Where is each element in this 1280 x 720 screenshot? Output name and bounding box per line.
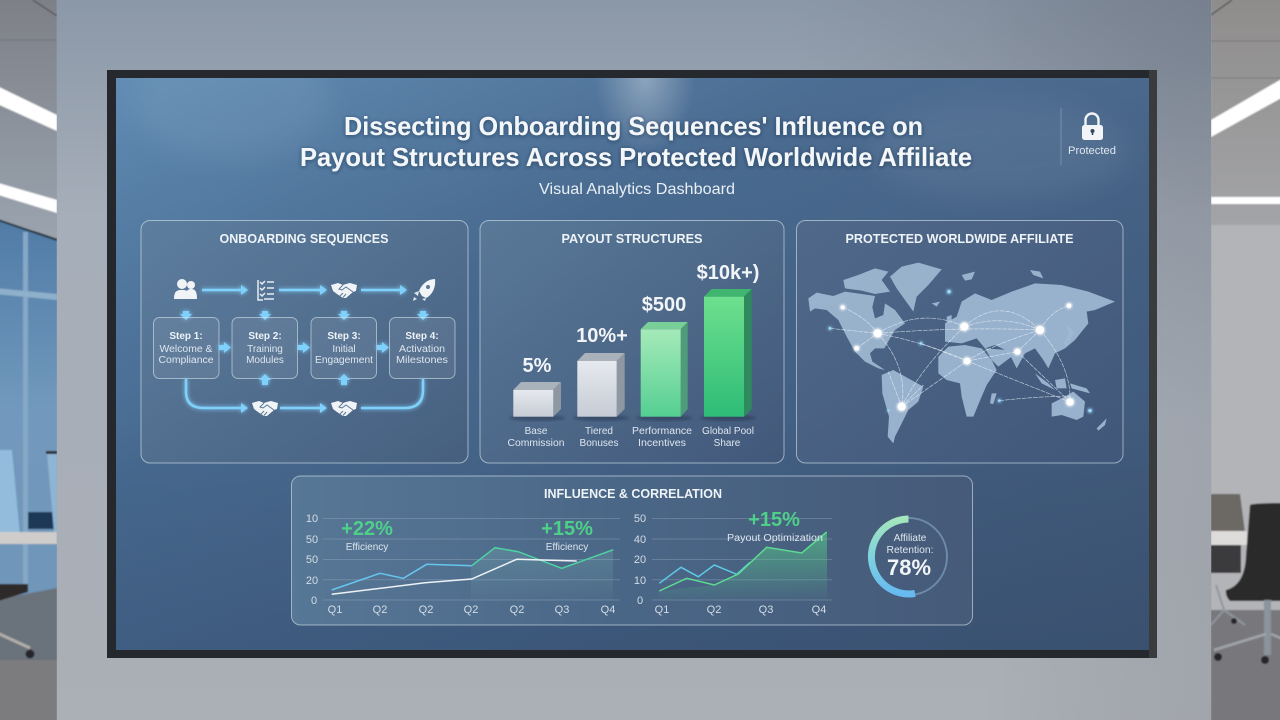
subtitle: Visual Analytics Dashboard xyxy=(539,181,735,198)
arrows: bottom loop xyxy=(186,379,423,413)
line chart: efficiency: Q4 xyxy=(601,604,615,616)
line chart: payout optimization: Q2 xyxy=(707,604,721,616)
heading: onboarding sequences: ONBOARDING SEQUENCES xyxy=(220,231,389,246)
line chart: efficiency: Q3 xyxy=(555,604,569,616)
line chart: efficiency: Q2 xyxy=(464,604,478,616)
donut: affiliate retention: Affiliate xyxy=(894,533,927,544)
line chart: payout optimization: 50 xyxy=(634,513,646,525)
bar: base commission 5%: Base xyxy=(525,426,548,437)
arrows: between steps xyxy=(219,342,389,353)
icon: checklist xyxy=(258,280,274,300)
step 4: Activation xyxy=(399,344,445,355)
line chart: efficiency: Q2 xyxy=(373,604,387,616)
step 1: Welcome & xyxy=(160,344,213,355)
bar: performance incentives $500: Performance xyxy=(632,426,692,437)
bar: performance incentives $500: $500 xyxy=(642,294,686,316)
protected badge xyxy=(1061,108,1116,165)
heading: influence and correlation: INFLUENCE & CORRELATION xyxy=(544,486,722,501)
line chart: payout optimization: +15% xyxy=(748,509,800,531)
map: connection lines xyxy=(830,306,1070,407)
donut: affiliate retention xyxy=(870,518,947,595)
step 4: Step 4: xyxy=(405,331,439,342)
panel: onboarding sequences xyxy=(141,220,468,463)
line chart: payout optimization: Q3 xyxy=(759,604,773,616)
bar: base commission 5%: Commission xyxy=(508,438,564,449)
line chart: payout optimization: 40 xyxy=(634,534,646,546)
step 1 xyxy=(154,318,219,378)
step 1: Step 1: xyxy=(169,331,203,342)
step 2: Training xyxy=(247,344,283,355)
step 4: Milestones xyxy=(396,355,448,366)
bar: tiered bonuses 10%+: 10%+ xyxy=(576,325,628,347)
bar: base commission 5% xyxy=(508,355,565,449)
line chart: efficiency: 20 xyxy=(306,575,318,587)
line chart: efficiency: Q2 xyxy=(419,604,433,616)
step 3: Engagement xyxy=(315,355,373,366)
title: Payout Structures Across Protected Worldwide Affiliate xyxy=(300,142,972,172)
map: land masses xyxy=(808,263,1115,443)
bar: tiered bonuses 10%+: Tiered xyxy=(585,426,613,437)
line chart: efficiency: Efficiency xyxy=(546,542,588,553)
icon: handshake top xyxy=(331,283,357,298)
panel: influence and correlation xyxy=(292,476,972,625)
line chart: payout optimization: 20 xyxy=(634,554,646,566)
map: nodes xyxy=(829,290,1092,412)
bar: tiered bonuses 10%+: Bonuses xyxy=(580,438,618,449)
line chart: efficiency: Q2 xyxy=(510,604,524,616)
line chart: payout optimization xyxy=(634,509,832,616)
panel: payout structures xyxy=(480,220,784,463)
bar: performance incentives $500: Incentives xyxy=(638,438,686,449)
monitor frame xyxy=(107,70,1157,658)
line chart: efficiency: +15% xyxy=(541,518,593,540)
step 4 xyxy=(390,318,455,378)
world map xyxy=(808,263,1115,443)
heading: payout structures: PAYOUT STRUCTURES xyxy=(562,231,703,246)
heading: protected worldwide affiliate: PROTECTED WORLDWIDE AFFILIATE xyxy=(846,231,1074,246)
title xyxy=(300,111,972,172)
bar: global pool share $10k+): Global Pool xyxy=(702,426,754,437)
line chart: efficiency: 50 xyxy=(306,554,318,566)
step 3: Initial xyxy=(332,344,356,355)
line chart: payout optimization: Q4 xyxy=(812,604,826,616)
line chart: payout optimization: 0 xyxy=(637,595,643,607)
arrows: top row xyxy=(202,285,407,295)
bar: global pool share $10k+): $10k+) xyxy=(697,262,759,284)
step 3 xyxy=(311,318,376,378)
bar: performance incentives $500 xyxy=(632,294,692,449)
line chart: efficiency: Efficiency xyxy=(346,542,388,553)
panel: protected worldwide affiliate xyxy=(796,220,1123,463)
line chart: efficiency: 10 xyxy=(306,513,318,525)
donut: affiliate retention: 78% xyxy=(887,555,931,580)
step 2 xyxy=(232,318,298,378)
donut: affiliate retention: Retention: xyxy=(886,545,934,556)
line chart: efficiency: +22% xyxy=(341,518,393,540)
bar: base commission 5%: 5% xyxy=(523,355,552,377)
bar: global pool share $10k+) xyxy=(697,262,759,449)
title: Dissecting Onboarding Sequences' Influence on xyxy=(344,111,923,141)
arrows: up into steps xyxy=(259,374,350,385)
icon: handshake bottom right xyxy=(331,401,357,416)
protected badge: Protected xyxy=(1068,145,1116,157)
line chart: efficiency: 50 xyxy=(306,534,318,546)
screen background xyxy=(116,78,1149,650)
line chart: payout optimization: Payout Optimization xyxy=(727,533,823,544)
arrows: down into steps xyxy=(180,311,429,320)
line chart: efficiency xyxy=(306,513,620,616)
bar: tiered bonuses 10%+ xyxy=(573,325,629,449)
background: office room right xyxy=(1211,0,1280,720)
icon: padlock xyxy=(1082,114,1103,140)
line chart: payout optimization: Q1 xyxy=(655,604,669,616)
step 2: Step 2: xyxy=(248,331,282,342)
line chart: efficiency: 0 xyxy=(311,595,317,607)
icon: rocket xyxy=(413,279,435,301)
bar: global pool share $10k+): Share xyxy=(714,438,741,449)
icon: people xyxy=(174,279,197,299)
icon: handshake bottom left xyxy=(252,401,278,416)
line chart: payout optimization: 10 xyxy=(634,575,646,587)
line chart: efficiency: Q1 xyxy=(328,604,342,616)
step 2: Modules xyxy=(246,355,284,366)
step 3: Step 3: xyxy=(327,331,361,342)
step 1: Compliance xyxy=(158,355,214,366)
background: office room left xyxy=(0,0,57,720)
